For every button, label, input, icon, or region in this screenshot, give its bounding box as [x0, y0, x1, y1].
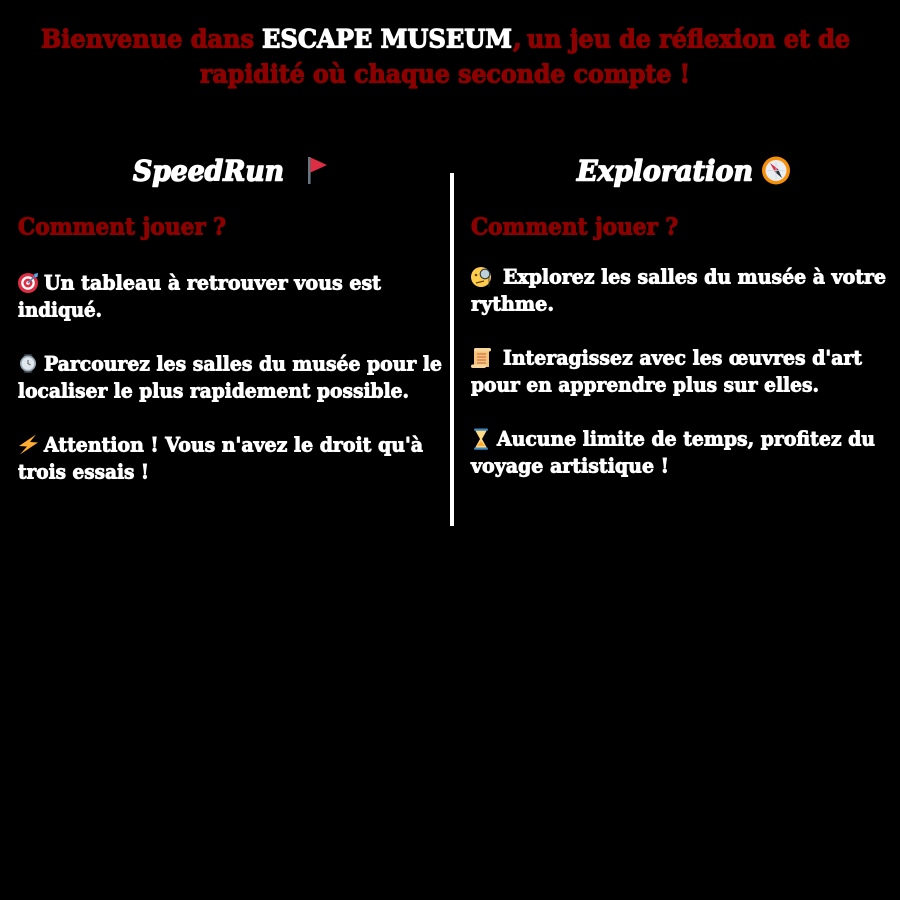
icon: red flag	[308, 157, 327, 184]
title: Bienvenue dans	[41, 24, 254, 54]
title: un jeu de réflexion et de	[527, 24, 850, 54]
icon: target	[18, 273, 38, 293]
icon: compass	[762, 156, 790, 184]
step 3 text	[18, 434, 423, 484]
icon: scroll	[471, 348, 491, 368]
step 1 text: Un tableau à retrouver vous est	[44, 272, 381, 294]
step 1 text: indiqué.	[18, 298, 102, 322]
title	[41, 24, 850, 88]
step 3 text: Attention ! Vous n'avez le droit qu'à	[43, 434, 423, 456]
title: ,	[513, 24, 522, 54]
step 3 text	[470, 428, 875, 478]
step 2 text: Parcourez les salles du musée pour le	[44, 352, 442, 376]
step 3 text: voyage artistique !	[470, 454, 669, 478]
panel: SpeedRun	[18, 154, 442, 484]
step 1 text	[471, 266, 886, 316]
panel: Exploration	[470, 154, 886, 478]
divider between modes	[450, 173, 454, 526]
step 2 text	[471, 346, 862, 396]
heading: SpeedRun: SpeedRun	[133, 154, 284, 188]
icon: face with monocle	[471, 267, 491, 287]
title: rapidité où chaque seconde compte !	[200, 60, 690, 88]
step 2 text: localiser le plus rapidement possible.	[18, 380, 409, 402]
subheading: how to play: Comment jouer ?	[471, 214, 678, 240]
title: ESCAPE MUSEUM	[262, 24, 512, 54]
step 3 text: Aucune limite de temps, profitez du	[496, 428, 875, 450]
step 1 text: Explorez les salles du musée à votre	[503, 266, 886, 288]
icon: lightning	[19, 434, 38, 454]
subheading: how to play: Comment jouer ?	[18, 214, 226, 240]
step 1 text: rythme.	[471, 292, 554, 316]
step 1 text	[18, 272, 381, 322]
step 3 text: trois essais !	[18, 460, 149, 484]
step 2 text: pour en apprendre plus sur elles.	[471, 374, 819, 396]
step 2 text: Interagissez avec les œuvres d'art	[503, 346, 862, 370]
step 2 text	[18, 352, 442, 402]
icon: watch	[20, 354, 36, 373]
heading: Exploration: Exploration	[576, 154, 753, 188]
icon: hourglass	[474, 428, 488, 450]
